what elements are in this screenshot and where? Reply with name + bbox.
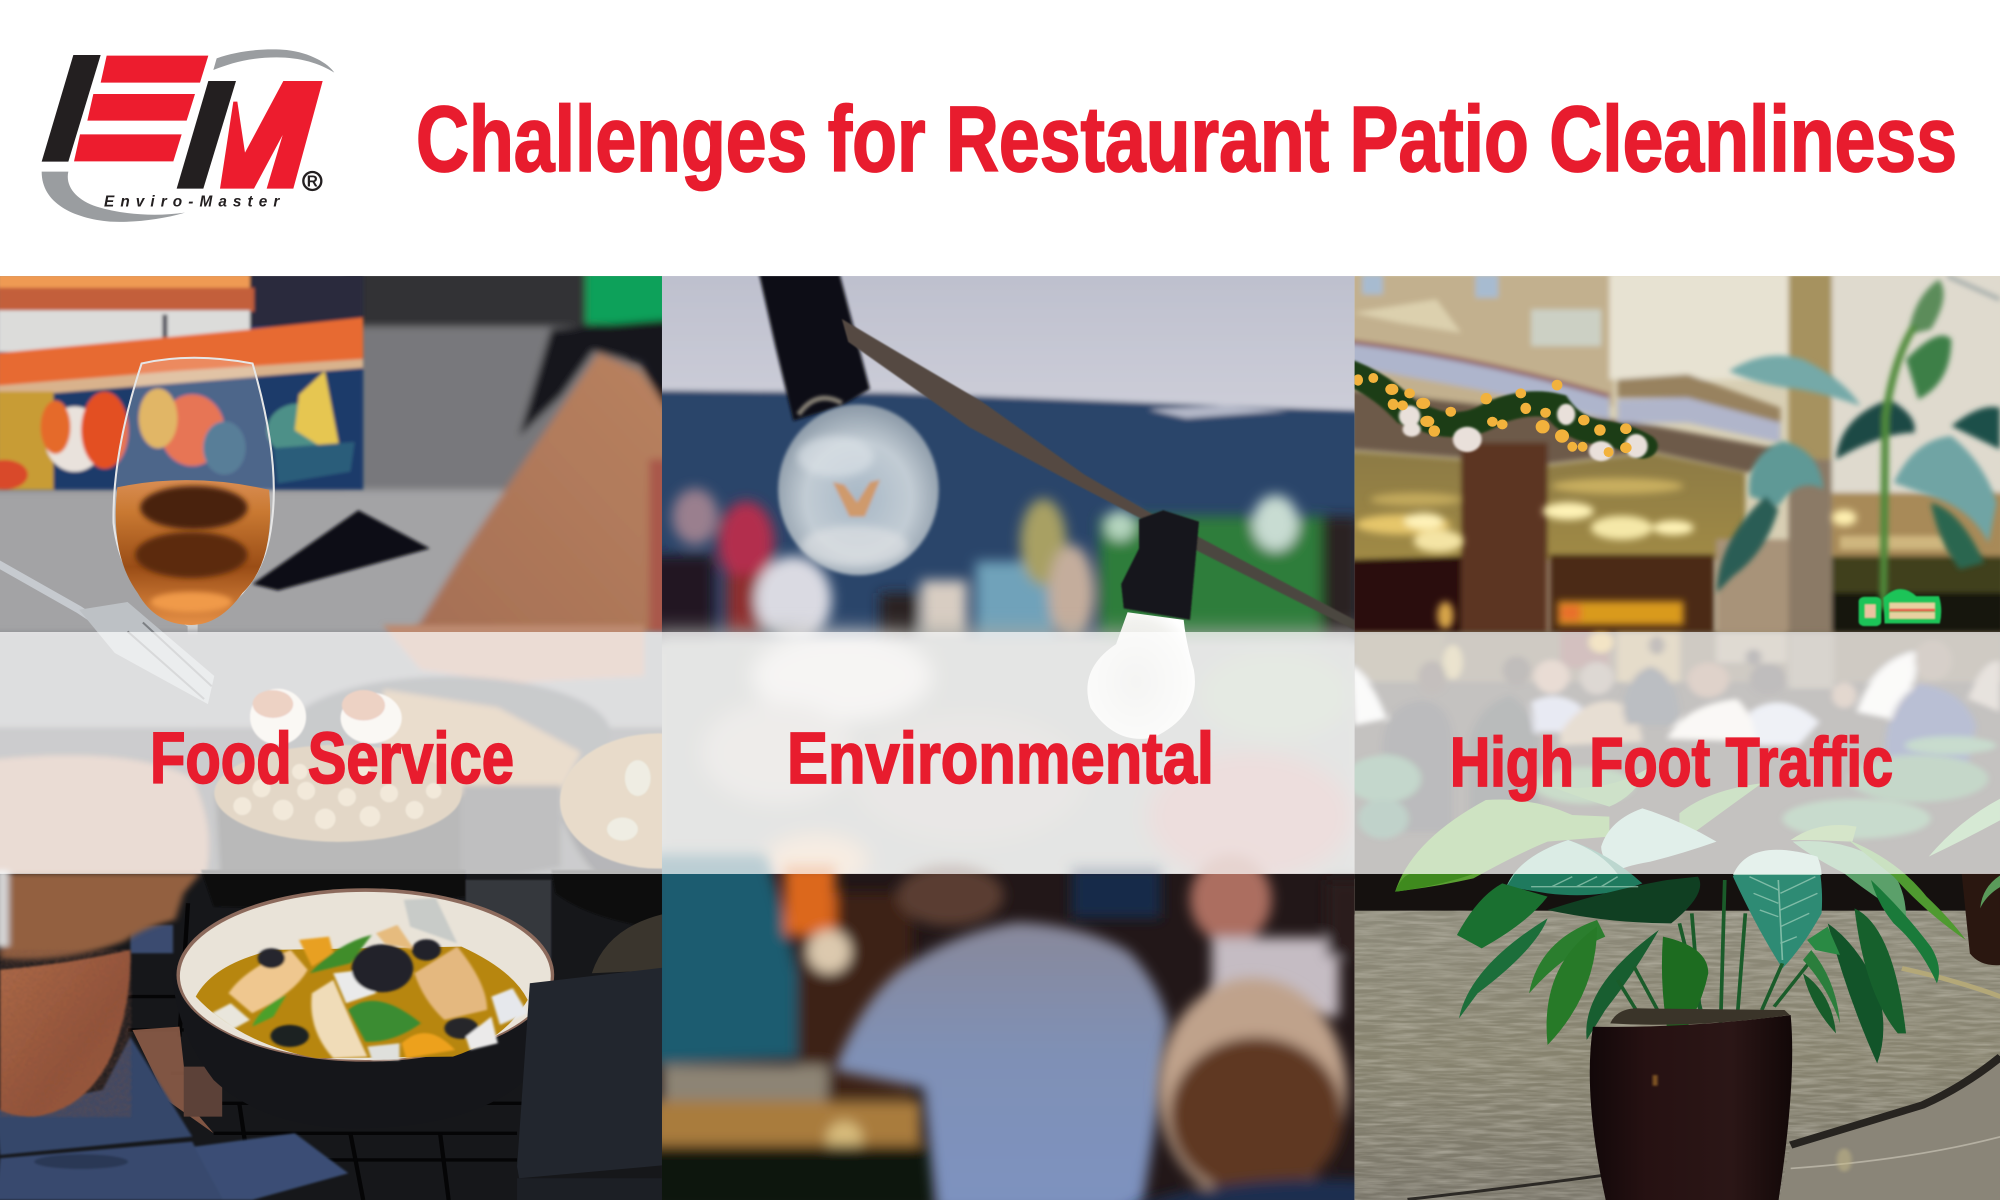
sky and navy awning: [651, 268, 1365, 644]
wine glass: [112, 356, 275, 632]
left socket: [758, 268, 870, 421]
header background: [0, 0, 2000, 277]
heading: Environmental: Environmental: [787, 719, 1214, 799]
dark pot: [1590, 1015, 1792, 1200]
phone: [253, 510, 430, 591]
floor: [1355, 874, 2000, 915]
garland: [1350, 373, 1648, 461]
palm fronds: [1717, 276, 2000, 609]
band background crowd: [1346, 632, 2000, 879]
heading: Food Service: Food Service: [150, 719, 514, 799]
band background: [651, 631, 1365, 886]
ceiling: [1350, 451, 1745, 559]
black card: [517, 967, 667, 1178]
logo: Enviro-Master: Enviro-Master: [104, 194, 280, 211]
right column: [1789, 273, 1832, 459]
upper pale leaves: [1395, 799, 1609, 892]
sofa, sleeve and arm: [0, 268, 676, 643]
left bulb: [778, 398, 939, 575]
copper cup: [0, 950, 131, 1117]
building: [1350, 273, 2000, 636]
distant planter: [1962, 873, 2000, 965]
logo: Enviro-Master: R: [307, 174, 318, 191]
translucent band: [0, 632, 2000, 874]
food bowl: [175, 888, 554, 1105]
people: [1383, 700, 1453, 832]
neon sign: [1859, 589, 1941, 626]
plant: [1395, 767, 2000, 1200]
right socket: [1121, 510, 1199, 620]
cable: [842, 319, 1355, 630]
napkins: [0, 925, 348, 1200]
band background: plates and hand: [0, 560, 662, 874]
heading: High Foot Traffic: High Foot Traffic: [1450, 723, 1893, 801]
stripes: [1350, 343, 1609, 419]
table grid: [128, 903, 526, 1200]
fork: [0, 561, 214, 704]
panel: high foot traffic photo: [1346, 273, 2000, 1200]
man in blue shirt: [834, 922, 1168, 1200]
lower crowd: [662, 874, 1355, 1200]
panel: environmental photo: [651, 268, 1365, 1200]
dark leaves: [1457, 883, 1548, 948]
pouch: [0, 273, 363, 489]
foreground head: [1122, 978, 1365, 1200]
blurred background crowd: [651, 489, 1360, 651]
right interior: [1832, 493, 2000, 559]
leaf veins: [1531, 877, 1817, 960]
hand: [0, 870, 201, 959]
panel: food service photo: [0, 276, 662, 1200]
floor ring: [1408, 968, 2000, 1200]
chickpea dishes: [214, 688, 662, 869]
small background leaf: [1929, 798, 2000, 857]
blurred background leaves: [1346, 755, 1420, 802]
small dark dish: [592, 913, 667, 973]
logo: Enviro-Master: [42, 49, 334, 222]
table base: [0, 870, 667, 1200]
ceiling lights: [1356, 478, 1857, 629]
right bulb: [1087, 612, 1195, 739]
beam: [1350, 389, 1780, 473]
